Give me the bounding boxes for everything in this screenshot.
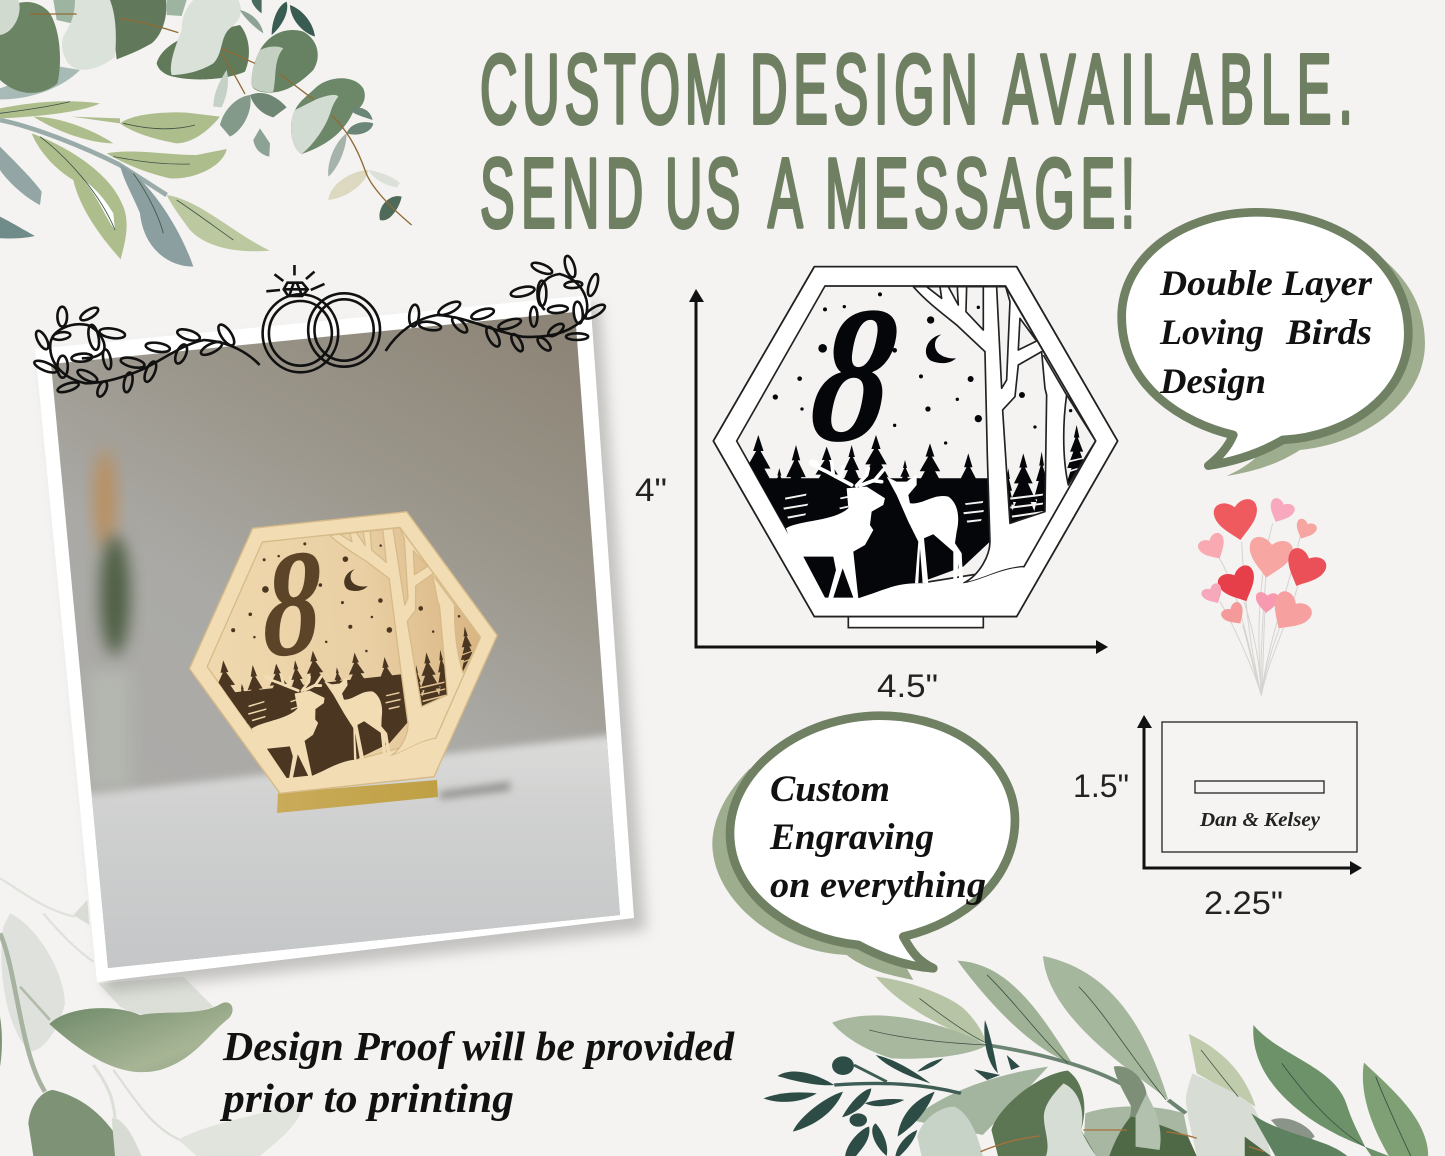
- hexagon line drawing with deer: [713, 267, 1118, 628]
- speech bubble: double layer: Birds: [1285, 312, 1372, 352]
- design proof note: prior to printing: [220, 1075, 514, 1121]
- speech bubble: custom engraving: [712, 716, 1015, 980]
- place card with dimensions: 2.25": [1204, 885, 1283, 921]
- design proof note: Design Proof will be provided: [222, 1023, 735, 1069]
- wooden hexagon sign: [176, 503, 511, 813]
- polaroid photo: deer table number: [35, 295, 646, 992]
- speech bubble: double layer: Loving: [1159, 312, 1264, 352]
- number eight on wood: 8: [263, 518, 321, 691]
- dimension axes: large sign: [635, 289, 1108, 704]
- speech bubble: custom engraving: on everything: [770, 865, 986, 906]
- foliage: bottom right: [763, 956, 1428, 1156]
- wedding rings and laurel doodle: [33, 255, 607, 398]
- foliage: top left: [0, 0, 412, 267]
- dimension axes: large sign: 4": [635, 472, 667, 508]
- speech bubble: custom engraving: Custom: [770, 769, 890, 810]
- title: [480, 34, 1353, 248]
- dimension axes: large sign: 4.5": [877, 668, 938, 704]
- speech bubble: double layer: Double Layer: [1159, 263, 1373, 303]
- title: SEND: [480, 138, 643, 248]
- title: MESSAGE!: [825, 138, 1135, 248]
- icon: heart balloons: [1196, 496, 1329, 696]
- speech bubble: double layer: Design: [1159, 361, 1266, 401]
- title: AVAILABLE.: [1003, 34, 1353, 144]
- speech bubble: double layer: [1122, 212, 1425, 476]
- foliage: bottom left: [0, 878, 305, 1156]
- title: CUSTOM: [480, 34, 728, 144]
- title: US: [665, 138, 740, 248]
- speech bubble: custom engraving: Engraving: [769, 817, 934, 858]
- place card with dimensions: Dan & Kelsey: [1199, 809, 1320, 831]
- title: A: [768, 138, 803, 248]
- design proof note: [220, 1023, 735, 1121]
- place card with dimensions: [1073, 715, 1362, 921]
- number eight on drawing: 8: [800, 268, 908, 483]
- title: DESIGN: [750, 34, 978, 144]
- place card with dimensions: 1.5": [1073, 768, 1129, 804]
